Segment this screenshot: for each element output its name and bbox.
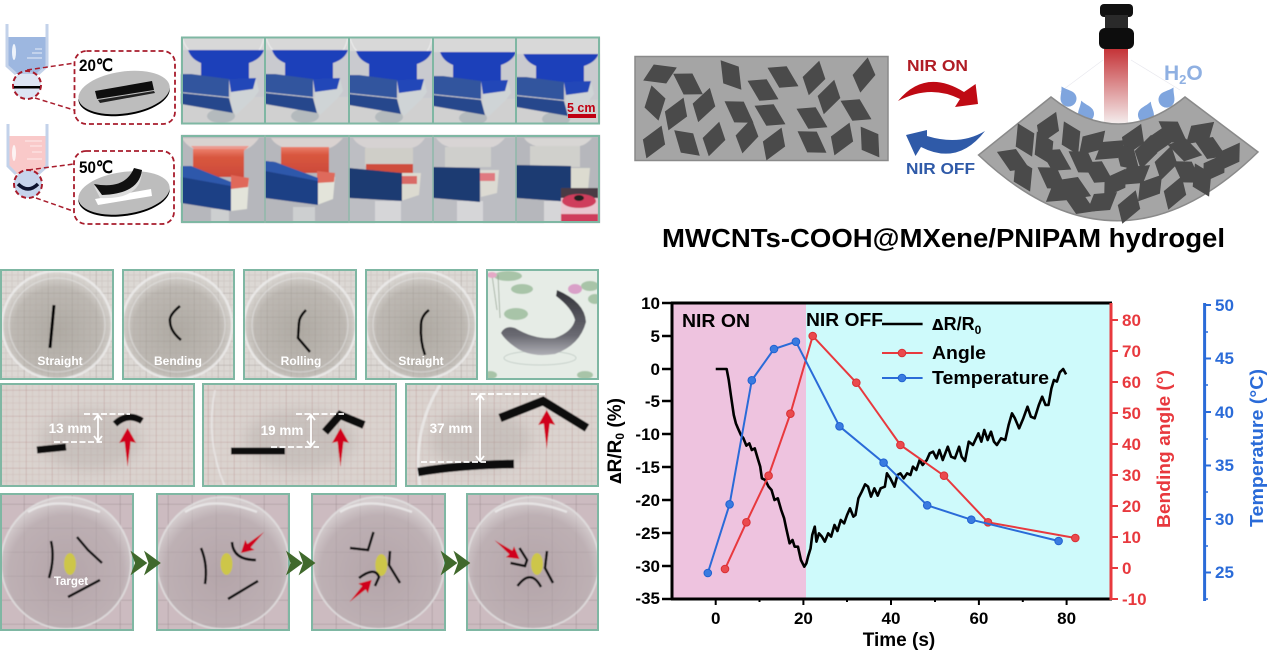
axis: far right temperature: 30 bbox=[1215, 510, 1234, 529]
axis: left delta R: 5 bbox=[651, 327, 660, 346]
photo: straight again: Straight bbox=[398, 354, 444, 368]
callout: 50°C zoom: 50℃ bbox=[79, 158, 113, 177]
panel: bent hydrogel with flakes bbox=[978, 97, 1258, 228]
photo: 13 mm bbox=[0, 383, 195, 487]
photo: target step 2 bbox=[156, 493, 290, 631]
axis: far right temperature: Temperature (°C) bbox=[1247, 369, 1267, 527]
arrow: NIR ON: NIR ON bbox=[907, 58, 968, 75]
axis: bottom time: Time (s) bbox=[863, 630, 935, 651]
axis: bottom time: 40 bbox=[882, 609, 900, 628]
axis: left delta R: 10 bbox=[641, 294, 660, 313]
icon: water drops and H2O: H bbox=[1164, 62, 1179, 85]
photo: blue 5 bbox=[517, 37, 600, 124]
panel: lift height measurements bbox=[0, 383, 599, 487]
axis: right bending angle bbox=[1111, 303, 1174, 609]
panel: hydrogel schematic bbox=[635, 4, 1258, 253]
panel: flat hydrogel with flakes bbox=[635, 54, 888, 165]
arrow: NIR OFF bbox=[906, 130, 985, 178]
axis: left delta R: (%) bbox=[605, 398, 626, 433]
photo: red 1 bbox=[180, 134, 265, 224]
axis: far right temperature: 45 bbox=[1215, 349, 1234, 368]
axis: right bending angle: -10 bbox=[1122, 590, 1147, 609]
line: bending angle bbox=[721, 332, 1079, 573]
axis: right bending angle: 50 bbox=[1122, 404, 1141, 423]
photo: target step 4 bbox=[466, 493, 599, 631]
icon: water drops and H2O bbox=[1055, 62, 1203, 125]
axis: far right temperature: 25 bbox=[1215, 563, 1234, 582]
axis: left delta R: -25 bbox=[635, 524, 660, 543]
axis: right bending angle: 30 bbox=[1122, 466, 1141, 485]
axis: far right temperature: 50 bbox=[1215, 296, 1234, 315]
callout: 20°C zoom: 20℃ bbox=[79, 56, 113, 75]
axis: bottom time bbox=[671, 303, 1112, 651]
axis: right bending angle: 40 bbox=[1122, 435, 1141, 454]
legend: ΔR/R bbox=[932, 314, 975, 334]
icon: water drops and H2O: O bbox=[1186, 62, 1203, 85]
legend: Temperature bbox=[932, 368, 1049, 388]
axis: left delta R: ΔR/R bbox=[605, 440, 626, 484]
photo: blue 4 bbox=[434, 38, 515, 122]
panel: red water photo sequence bbox=[181, 135, 600, 223]
photo: red 2 bbox=[265, 134, 349, 224]
axis: bottom time: 20 bbox=[794, 609, 813, 628]
arrow: chevrons 3 bbox=[442, 552, 470, 574]
photo: rolling bbox=[243, 269, 357, 380]
axis: left delta R: 0 bbox=[651, 360, 660, 379]
photo: blue 3 bbox=[350, 38, 432, 122]
inset: red dish bbox=[561, 188, 598, 222]
photo: target step 3 bbox=[311, 493, 446, 631]
photo: bending bbox=[122, 269, 235, 380]
photo: straight: Straight bbox=[37, 354, 83, 368]
callout: 50°C zoom bbox=[28, 151, 174, 224]
arrow: NIR ON bbox=[898, 58, 978, 107]
label: NIR OFF: NIR OFF bbox=[806, 310, 883, 330]
icon: NIR lamp and beam bbox=[1060, 4, 1180, 124]
arrow: chevrons 1 bbox=[132, 552, 160, 574]
photo: red 3 bbox=[349, 134, 434, 224]
axis: right bending angle: 70 bbox=[1122, 342, 1141, 361]
callout: 20°C zoom bbox=[27, 51, 175, 124]
background: NIR ON region bbox=[672, 303, 806, 599]
photo: straight bbox=[0, 269, 114, 380]
panel: blue water photo sequence bbox=[181, 37, 600, 127]
axis: far right temperature: 35 bbox=[1215, 456, 1234, 475]
background: NIR OFF region bbox=[806, 303, 1111, 599]
axis: left delta R: -10 bbox=[635, 425, 660, 444]
panel: 20°C beaker schematic bbox=[6, 24, 175, 124]
axis: right bending angle: Bending angle (°) bbox=[1154, 370, 1174, 528]
axis: bottom time: 0 bbox=[711, 609, 720, 628]
icon: water drops and H2O: 2 bbox=[1179, 72, 1186, 87]
arrow: NIR OFF: NIR OFF bbox=[906, 161, 975, 178]
axis: left delta R: -15 bbox=[635, 458, 660, 477]
photo: blue 2 bbox=[266, 38, 348, 122]
chart: NIR response bbox=[605, 294, 1267, 651]
axis: right bending angle: 80 bbox=[1122, 311, 1141, 330]
axis: right bending angle: 60 bbox=[1122, 373, 1141, 392]
axis: right bending angle: 10 bbox=[1122, 528, 1141, 547]
legend: 0 bbox=[975, 323, 982, 337]
panel: target grasping sequence bbox=[0, 493, 599, 631]
photo: red 5 with inset bbox=[516, 134, 600, 224]
photo: bending: Bending bbox=[154, 354, 202, 368]
title: MWCNTs-COOH@MXene/PNIPAM hydrogel bbox=[662, 225, 1225, 253]
photo: blue 1 bbox=[180, 38, 264, 124]
photo: 19 mm bbox=[202, 383, 397, 487]
axis: left delta R: -20 bbox=[635, 491, 660, 510]
axis: left delta R: -30 bbox=[635, 557, 660, 576]
photo: target step 1 bbox=[0, 493, 134, 631]
axis: left delta R: -5 bbox=[645, 392, 660, 411]
scale bar: 5 cm: 5 cm bbox=[567, 101, 596, 115]
photo: rolling: Rolling bbox=[281, 354, 321, 368]
axis: left delta R bbox=[605, 294, 672, 608]
photo: 13 mm: 13 mm bbox=[49, 421, 91, 436]
axis: left delta R: 0 bbox=[613, 433, 627, 440]
photo: 19 mm: 19 mm bbox=[261, 423, 303, 438]
icon: beaker with pink liquid bbox=[7, 124, 47, 198]
panel: petri dish motion states bbox=[0, 269, 602, 380]
photo: red 4 bbox=[433, 134, 516, 224]
label: NIR ON: NIR ON bbox=[682, 311, 750, 331]
line: temperature bbox=[704, 338, 1062, 577]
illustration: eel in lily pond bbox=[486, 269, 599, 380]
photo: 37 mm: 37 mm bbox=[430, 421, 472, 436]
photo: straight again bbox=[365, 269, 478, 380]
axis: right bending angle: 20 bbox=[1122, 497, 1141, 516]
axis: left delta R: -35 bbox=[635, 589, 660, 608]
photo: target step 1: Target bbox=[54, 576, 88, 588]
legend: Angle bbox=[932, 343, 986, 363]
line: delta R over R0 bbox=[716, 369, 1066, 567]
axis: bottom time: 60 bbox=[969, 609, 988, 628]
photo: 37 mm bbox=[405, 383, 599, 487]
axis: far right temperature: 40 bbox=[1215, 403, 1234, 422]
panel: 50°C beaker schematic bbox=[7, 124, 174, 224]
arrow: chevrons 2 bbox=[287, 552, 315, 574]
axis: far right temperature bbox=[1204, 296, 1267, 601]
axis: bottom time: 80 bbox=[1057, 609, 1076, 628]
axis: right bending angle: 0 bbox=[1122, 559, 1131, 578]
legend bbox=[882, 314, 1049, 388]
icon: beaker with blue liquid bbox=[6, 24, 47, 99]
